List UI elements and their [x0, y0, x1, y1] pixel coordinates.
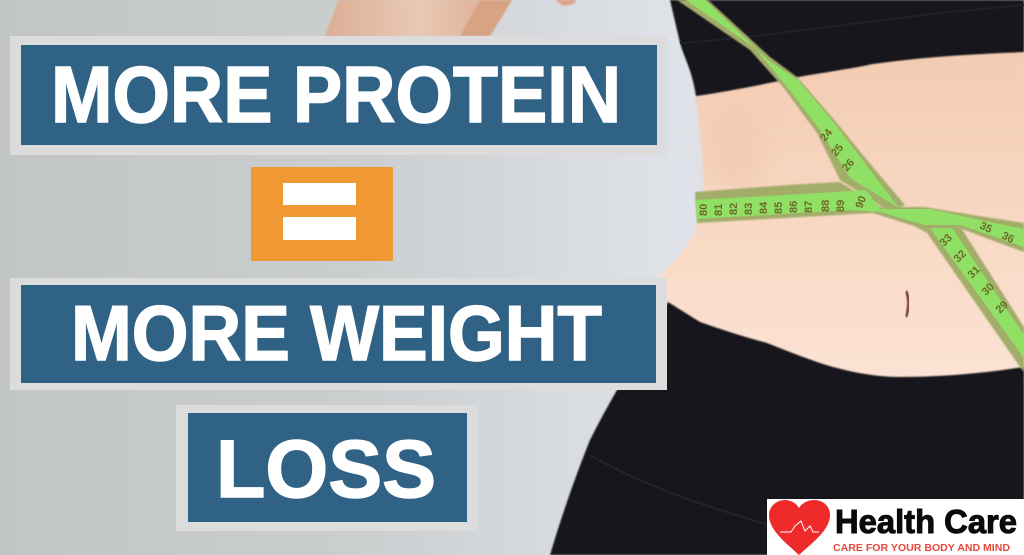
leggings seam — [590, 455, 768, 525]
tape numbers diagonal: 33 — [938, 232, 955, 249]
panel: more weight — [10, 278, 667, 390]
panel fill — [21, 45, 657, 145]
horizontal tape — [695, 182, 1024, 252]
tape numbers horizontal: 83 — [743, 203, 755, 215]
tape numbers horizontal: 82 — [728, 203, 740, 215]
icon: heart — [769, 500, 830, 555]
tape numbers horizontal: 86 — [788, 201, 800, 213]
skin — [660, 40, 1024, 385]
tape numbers diagonal: 31 — [966, 264, 983, 281]
panel fill — [21, 285, 656, 383]
lower diagonal tape — [915, 226, 1024, 372]
icon: heartbeat line — [780, 521, 819, 532]
tape numbers diagonal: 32 — [952, 248, 969, 265]
black crop top — [670, 0, 1024, 96]
belly shading — [707, 105, 763, 195]
tape numbers horizontal: 81 — [713, 204, 725, 216]
crop top band seam — [680, 5, 1024, 43]
torso — [550, 0, 1024, 555]
logo tagline: CARE FOR YOUR BODY AND MIND — [833, 542, 1010, 554]
tape numbers horizontal: 90 — [854, 194, 869, 210]
panel frame — [10, 278, 667, 390]
tape numbers diagonal: 30 — [980, 281, 997, 298]
logo: health care — [767, 499, 1024, 555]
tape numbers horizontal: 85 — [773, 202, 785, 214]
tape numbers diagonal: 29 — [994, 299, 1011, 316]
tape numbers horizontal: 80 — [698, 204, 710, 216]
tape numbers horizontal: 87 — [803, 201, 815, 213]
tape numbers diagonal: 36 — [1000, 230, 1016, 246]
measuring tape — [677, 0, 1024, 372]
diagonal tape — [677, 0, 905, 212]
panel: loss — [176, 405, 478, 531]
tape numbers diagonal: 24 — [818, 126, 836, 144]
arm at top — [325, 0, 577, 36]
panel frame — [10, 36, 667, 155]
logo name: Health Care — [835, 503, 1017, 540]
icon: equals sign — [251, 167, 393, 261]
tape numbers diagonal: 26 — [840, 157, 857, 174]
tape numbers diagonal — [818, 126, 1016, 316]
panel frame — [176, 405, 478, 531]
navel — [906, 291, 908, 317]
heading: more weight: MORE WEIGHT — [71, 289, 602, 377]
black leggings — [550, 302, 1024, 555]
panel fill — [188, 413, 467, 522]
heading: loss: LOSS — [216, 424, 436, 515]
tape numbers horizontal: 88 — [820, 200, 832, 212]
tape numbers diagonal: 35 — [978, 220, 994, 236]
tape numbers horizontal: 84 — [758, 201, 770, 214]
tape numbers horizontal: 89 — [835, 200, 847, 212]
heading: more protein: MORE PROTEIN — [51, 50, 621, 139]
panel: more protein — [10, 36, 667, 155]
tape numbers diagonal: 25 — [829, 142, 846, 159]
tape numbers horizontal — [698, 194, 869, 216]
logo background — [767, 499, 1024, 555]
